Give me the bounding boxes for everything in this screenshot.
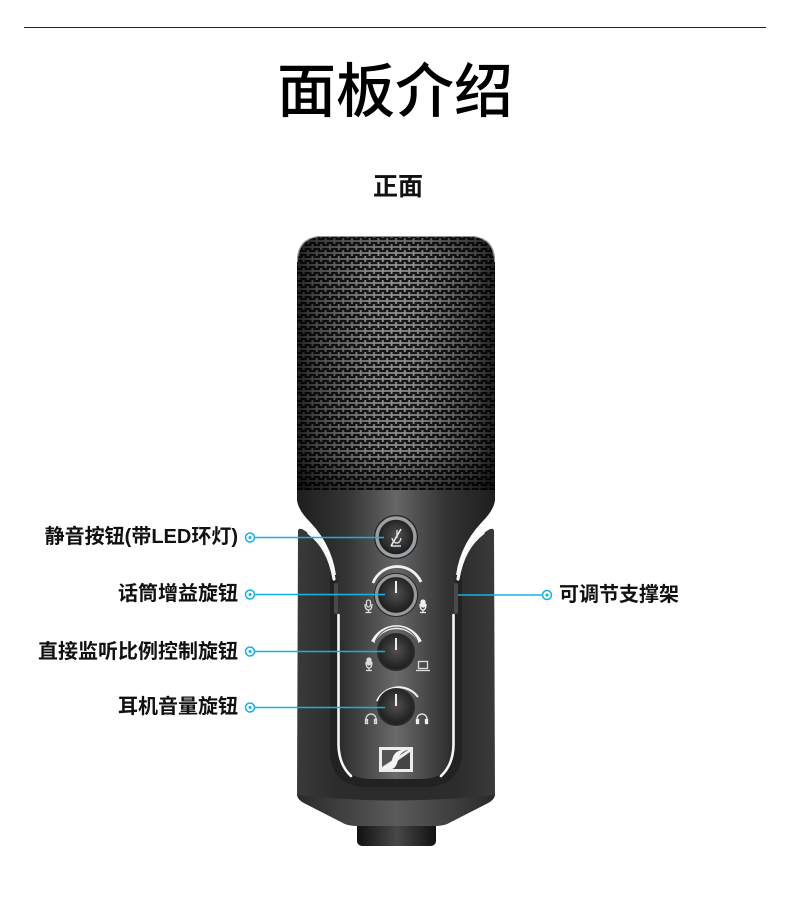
mute button — [374, 515, 418, 559]
mic gain knob — [365, 566, 426, 617]
top rule — [24, 27, 766, 28]
subtitle: front: 正面 — [373, 173, 423, 201]
title: 面板介绍 — [277, 59, 513, 125]
direct monitor mix knob — [366, 627, 430, 671]
label: direct monitor mix knob: 直接监听比例控制旋钮 — [38, 641, 238, 663]
grille — [297, 236, 495, 490]
leader: mic gain — [246, 590, 385, 599]
white cradle highlights — [309, 533, 483, 776]
label: mute button: 静音按钮(带LED环灯) — [45, 526, 238, 548]
inner recess and face — [330, 540, 462, 787]
label: adjustable stand: 可调节支撑架 — [559, 584, 679, 606]
leader: mute button — [246, 533, 384, 542]
foot — [357, 815, 436, 846]
leader: adjustable stand — [458, 590, 552, 600]
headphone volume knob — [366, 687, 428, 726]
label: headphone volume knob: 耳机音量旋钮 — [118, 696, 238, 718]
brand logo — [379, 747, 413, 772]
leader: direct monitor — [246, 647, 385, 656]
label: mic gain knob: 话筒增益旋钮 — [118, 583, 238, 605]
body neck — [297, 480, 495, 640]
cradle base — [297, 529, 495, 826]
leader: headphone volume — [246, 703, 385, 712]
